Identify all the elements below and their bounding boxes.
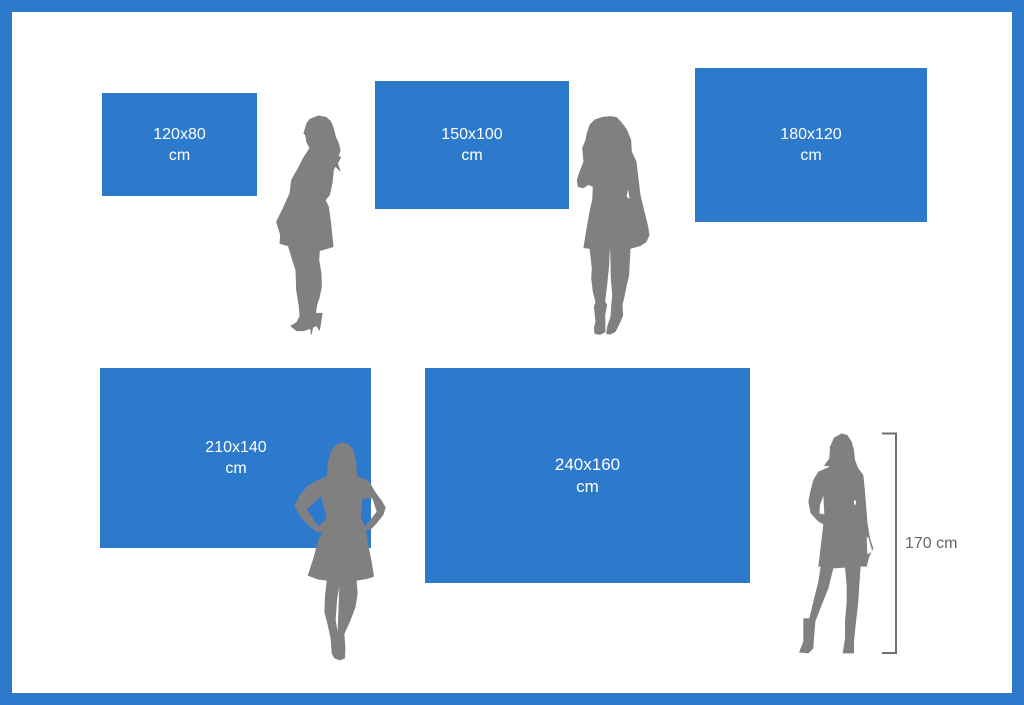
panel: 180x120 cm size: [695, 68, 927, 222]
height bracket: [882, 434, 896, 653]
panel: 150x100 cm size: [375, 81, 569, 209]
panel: 240x160 cm size: cm: [576, 477, 599, 496]
icon: woman silhouette with curly hair: [577, 117, 649, 334]
icon: woman silhouette with hands on hips: [294, 443, 386, 660]
panel: 120x80 cm size: [102, 93, 257, 196]
panel: 210x140 cm size: [100, 368, 371, 548]
panel: 240x160 cm size: [425, 368, 750, 583]
panel: 210x140 cm size: 210x140: [205, 439, 267, 456]
panel: 150x100 cm size: cm: [461, 147, 483, 164]
icon: reference woman silhouette: [799, 433, 873, 653]
panel: 210x140 cm size: cm: [225, 460, 247, 477]
icon: woman silhouette in side view: [277, 116, 341, 334]
height label: 170 cm: [905, 535, 957, 552]
panel: 180x120 cm size: cm: [800, 147, 822, 164]
panel: 120x80 cm size: 120x80: [153, 126, 206, 143]
panel: 180x120 cm size: 180x120: [780, 126, 842, 143]
panel: 240x160 cm size: 240x160: [555, 455, 620, 474]
panel: 150x100 cm size: 150x100: [441, 126, 503, 143]
panel: 120x80 cm size: cm: [169, 147, 190, 164]
